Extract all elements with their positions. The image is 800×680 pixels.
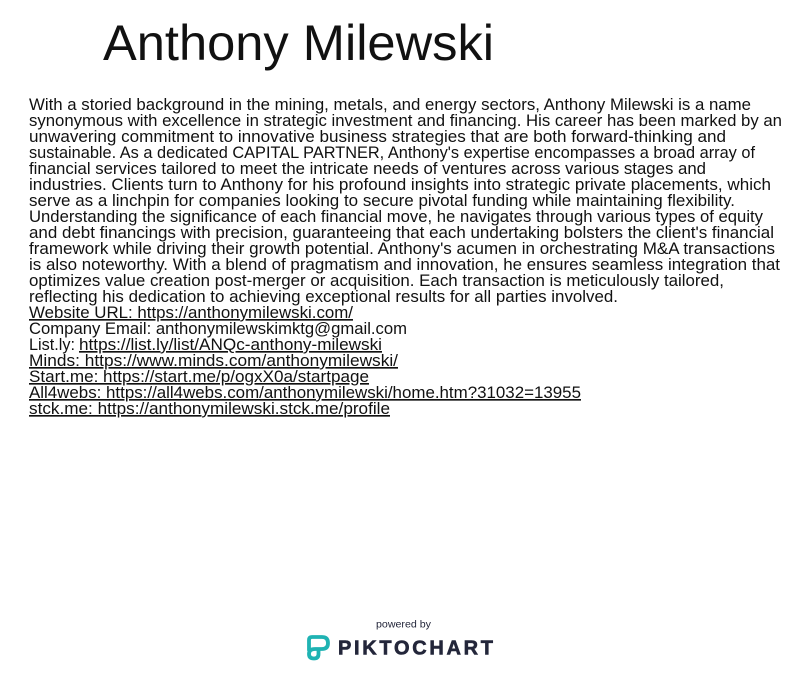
- biography paragraph: serve as a linchpin for companies looking to secure pivotal funding while maintaining flexibility.: [29, 192, 735, 210]
- contact links list: https://list.ly/list/ANQc-anthony-milewski: [79, 336, 382, 354]
- biography paragraph: sustainable. As a dedicated CAPITAL PARTNER, Anthony's expertise encompasses a broad array of: [29, 144, 755, 162]
- biography paragraph: industries. Clients turn to Anthony for his profound insights into strategic private placements, which: [29, 176, 771, 194]
- contact links list: Minds: https://www.minds.com/anthonymilewski/: [29, 352, 398, 370]
- icon: Piktochart logo mark: [309, 637, 328, 658]
- biography paragraph: optimizes value creation post-merger or acquisition. Each transaction is meticulously tailored,: [29, 272, 724, 290]
- contact links list: Start.me: https://start.me/p/ogxX0a/startpage: [29, 368, 369, 386]
- contact links list: Website URL: https://anthonymilewski.com/: [29, 304, 353, 322]
- biography paragraph: reflecting his dedication to achieving exceptional results for all parties involved.: [29, 288, 618, 306]
- powered by Piktochart badge: [309, 618, 493, 660]
- contact links list: [29, 304, 581, 418]
- wordmark: PIKTOCHART: [338, 638, 493, 660]
- biography paragraph: unwavering commitment to innovative business strategies that are both forward-thinking and: [29, 128, 726, 146]
- biography paragraph: With a storied background in the mining, metals, and energy sectors, Anthony Milewski is a name: [29, 96, 751, 114]
- biography paragraph: framework while driving their growth potential. Anthony's acumen in orchestrating M&A transactions: [29, 240, 775, 258]
- biography paragraph: [29, 96, 782, 306]
- biography paragraph: is also noteworthy. With a blend of pragmatism and innovation, he ensures seamless integration that: [29, 256, 780, 274]
- contact links list: stck.me: https://anthonymilewski.stck.me/profile: [29, 400, 390, 418]
- contact links list: All4webs: https://all4webs.com/anthonymilewski/home.htm?31032=13955: [29, 384, 581, 402]
- biography paragraph: synonymous with excellence in strategic investment and financing. His career has been marked by an: [29, 112, 782, 130]
- powered by label: powered by: [376, 618, 432, 630]
- contact links list: Company Email: anthonymilewskimktg@gmail.com: [29, 320, 407, 338]
- biography paragraph: Understanding the significance of each financial move, he navigates through various types of equity: [29, 208, 764, 226]
- biography paragraph: and debt financings with precision, guaranteeing that each undertaking bolsters the client's financial: [29, 224, 774, 242]
- biography paragraph: financial services tailored to meet the intricate needs of ventures across various stages and: [29, 160, 706, 178]
- title: Anthony Milewski: [103, 15, 494, 71]
- contact links list: List.ly:: [29, 336, 75, 354]
